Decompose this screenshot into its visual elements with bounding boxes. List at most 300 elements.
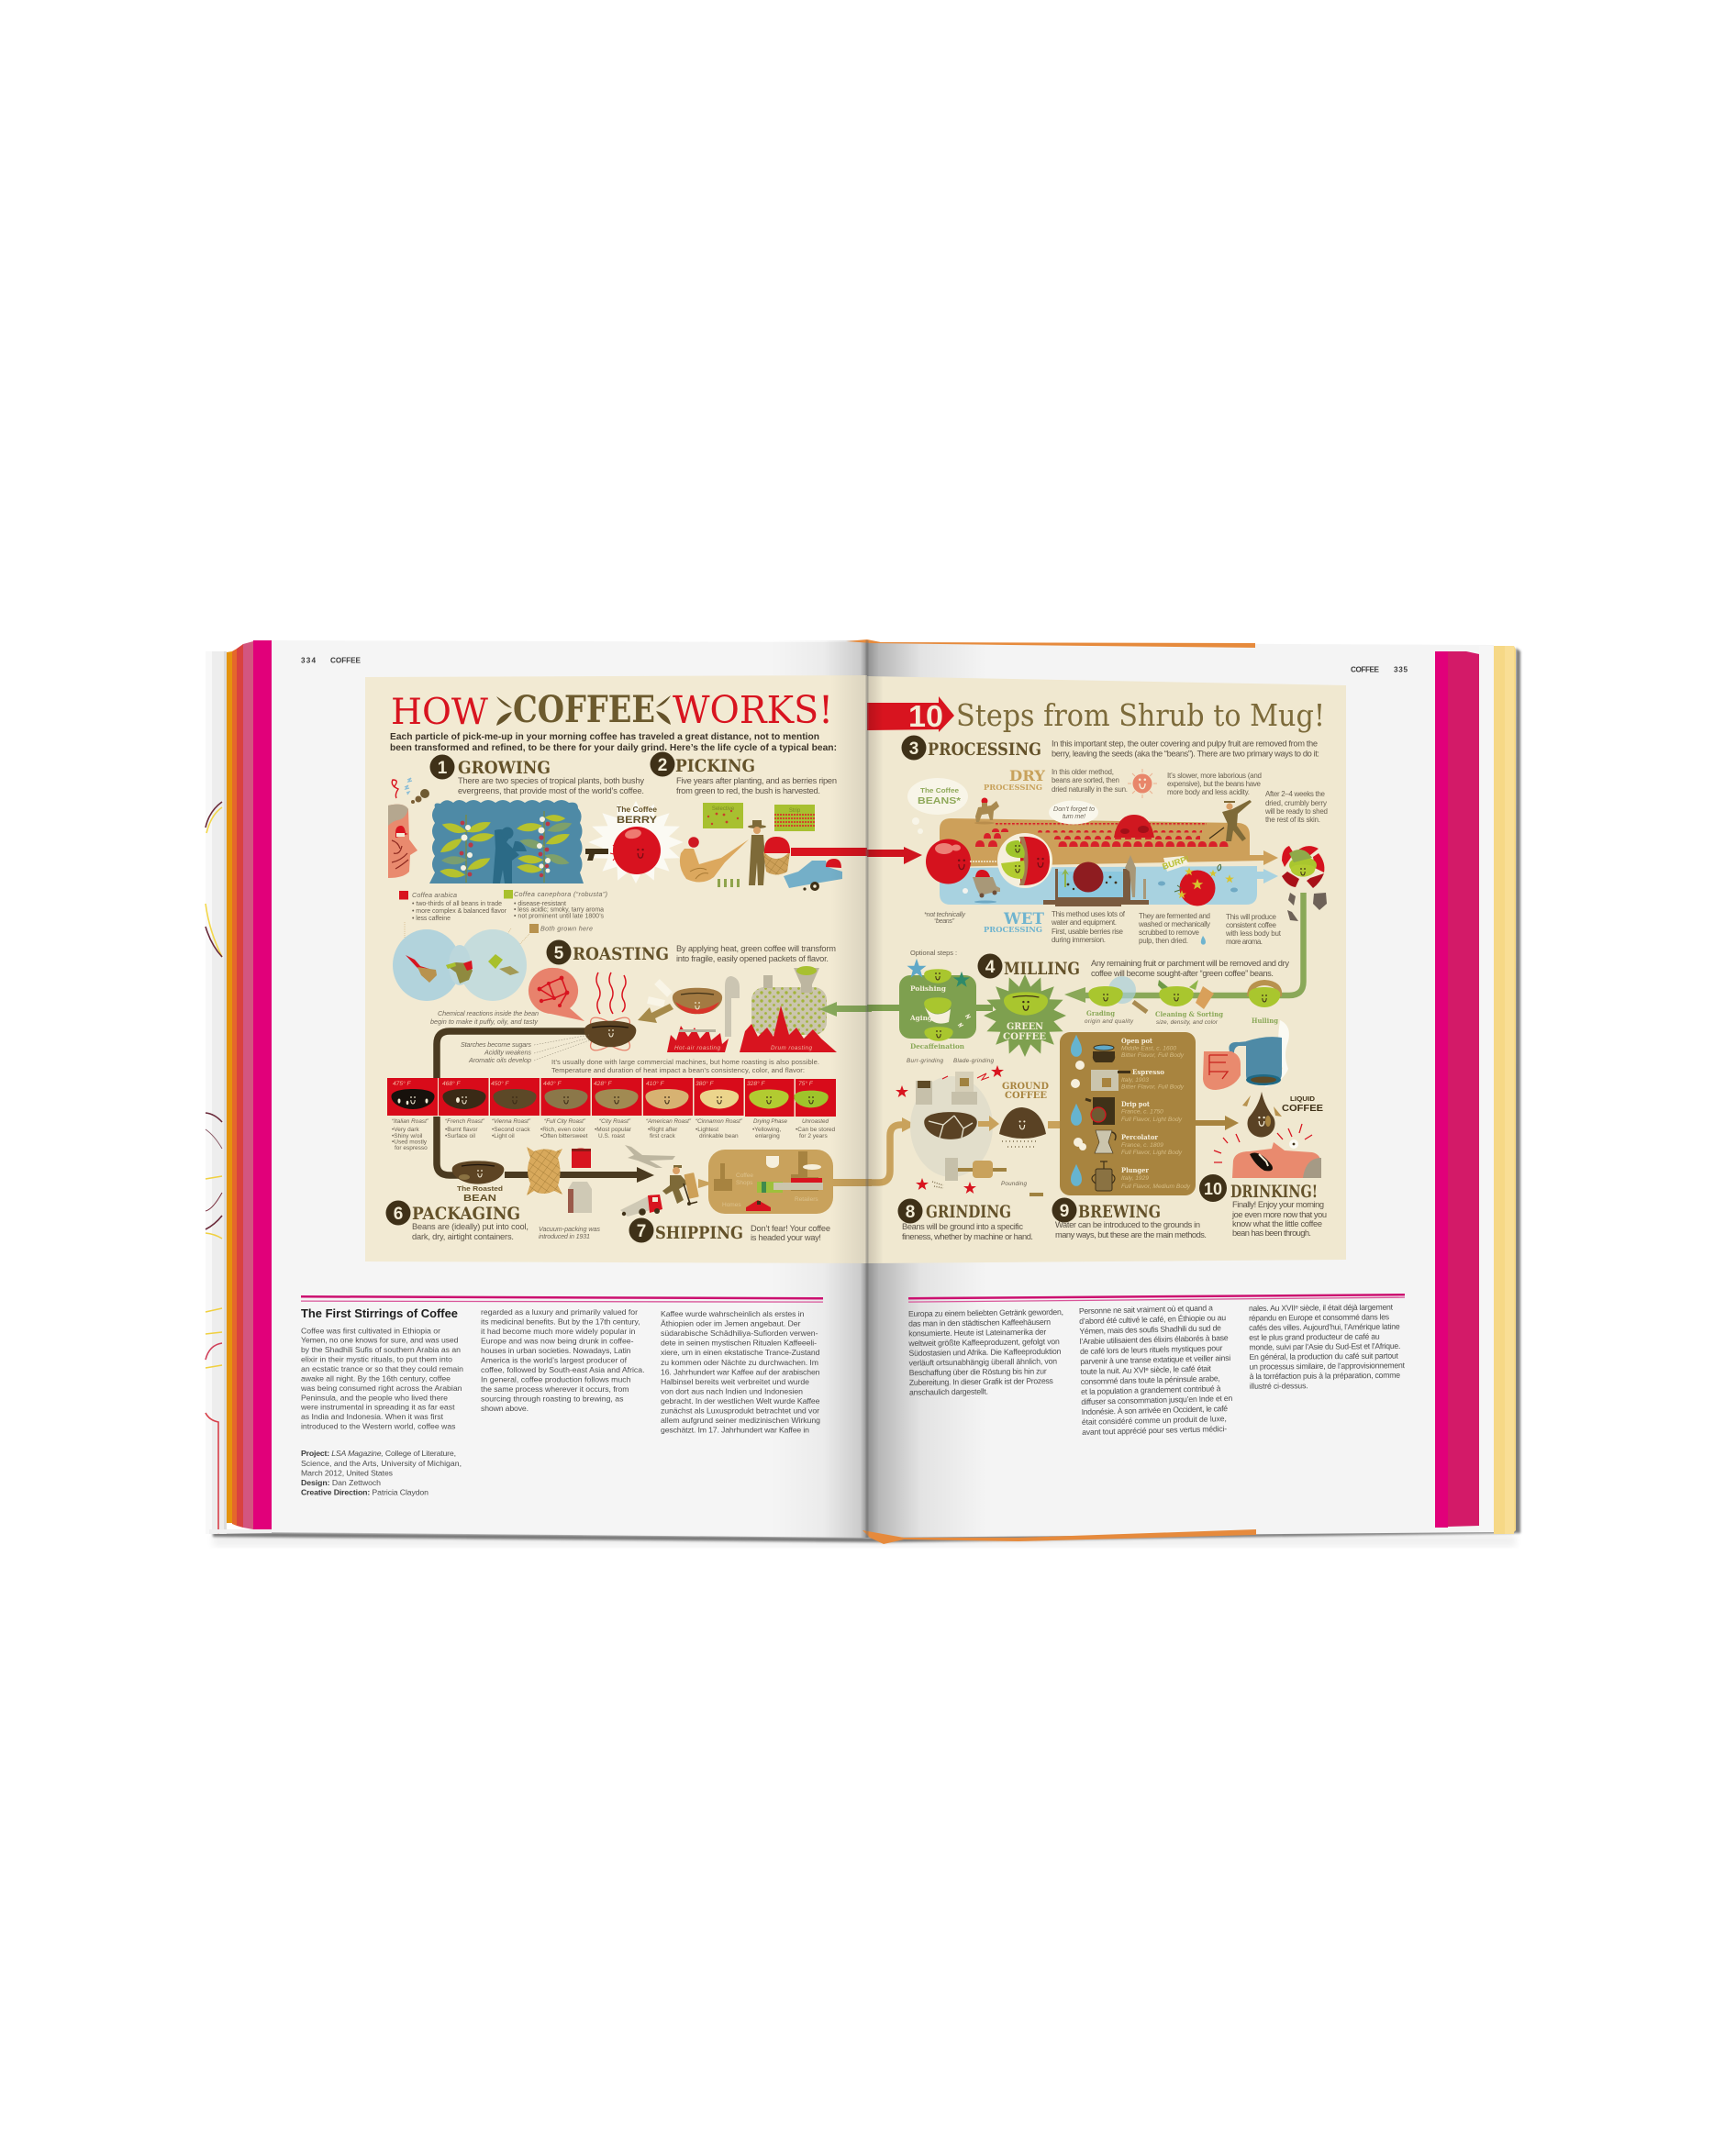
callout: don't forget to turn me: Don’t forget to xyxy=(1053,805,1095,813)
text: vacuum packing note: introduced in 1931 xyxy=(539,1232,590,1240)
chart: roast temperature strip: 468° F xyxy=(442,1080,461,1087)
step 2 picking heading: Five years after planting, and as berries ripen xyxy=(676,776,837,785)
text: dry method: will be ready to shed xyxy=(1264,807,1328,816)
text: grinding type labels xyxy=(907,1058,994,1064)
legend: coffee arabica: • more complex & balanced flavor xyxy=(412,908,507,915)
text: roast labels: “City Roast” xyxy=(599,1118,631,1125)
step 4 milling heading: coffee will become sought-after “green coffee” beans. xyxy=(1091,969,1274,978)
method: plunger: Italy, 1929 xyxy=(1121,1175,1149,1182)
text block: English column 1: Coffee was first cultivated in Ethiopia or xyxy=(301,1326,440,1335)
text: wet method: pulp, then dried. xyxy=(1139,937,1188,945)
text block: English column 1 xyxy=(300,1326,463,1431)
text block: French column 2: à la torréfaction puis à la préparation, comme xyxy=(1250,1371,1400,1381)
text: roast labels: •Light oil xyxy=(492,1133,515,1139)
legend: coffee canephora: • not prominent until late 1800’s xyxy=(514,914,604,919)
arrow: tan, roaster to bean xyxy=(638,1004,673,1023)
text block: French column 1: de café lors de leurs rituels mystiques pour xyxy=(1080,1343,1223,1356)
text: optional steps: Optional steps : xyxy=(910,949,957,957)
running head right xyxy=(1351,666,1408,673)
illustration: fermenting berry: BURP! xyxy=(1162,854,1191,872)
text: wet method: scrubbed to remove xyxy=(1139,928,1200,937)
illustration: roasted bean: BEAN xyxy=(463,1193,496,1204)
step 6 packaging heading: Beans are (ideally) put into cool, xyxy=(412,1222,529,1231)
legend: coffee canephora: • less acidic; smoky, tarry aroma xyxy=(514,906,604,914)
path: dark line roast strip to roasted bean xyxy=(437,1117,463,1175)
text: roast labels: •Used mostly xyxy=(392,1139,428,1145)
rule lines left xyxy=(301,1295,823,1303)
text: first stirrings heading: The First Stirrings of Coffee xyxy=(301,1306,458,1320)
text block: French column 2: un processus similaire, de l’approvisionnement xyxy=(1249,1361,1406,1372)
step 5 roasting heading: into fragile, easily opened packets of flavor. xyxy=(676,954,829,963)
text block: German column xyxy=(661,1309,820,1435)
text: bean changes: Aromatic oils develop xyxy=(468,1056,531,1064)
step 9 brewing heading xyxy=(1052,1198,1207,1239)
step 8 grinding heading: Beans will be ground into a specific xyxy=(902,1222,1023,1231)
illustration: washing basin xyxy=(1043,855,1149,906)
illustration: big berry xyxy=(926,839,971,884)
illustration: drum roaster xyxy=(740,966,872,1052)
text block: German column: xiere, um in einen ekstatische Trance-Zustand xyxy=(661,1348,820,1357)
text block: English column 1: awake all night. By the 16th century, coffee xyxy=(301,1373,451,1383)
step 8 grinding heading xyxy=(897,1198,1033,1241)
banner: 10 steps heading: Steps from Shrub to Mug! xyxy=(956,697,1325,733)
legend: coffee canephora: Coffea canephora (“robusta”) xyxy=(514,890,607,898)
text block: French column 2: nales. Au XVIIᵉ siècle, il était déjà largement xyxy=(1249,1303,1394,1313)
text block: English column 1: introduced to the Western world, coffee was xyxy=(301,1422,456,1431)
text block: French column 1: Indonésie. À son arrivée en Occident, le café xyxy=(1081,1404,1228,1417)
step 6 packaging heading: PACKAGING xyxy=(412,1204,520,1224)
text block: English column 1: Yemen, no one knows for sure, and was used xyxy=(301,1336,459,1345)
text block: French column 1: et la population a grandement contribué à xyxy=(1081,1384,1221,1396)
text: dry method: expensive), but the beans have xyxy=(1167,780,1262,788)
dry processing label xyxy=(984,767,1046,793)
step 6 packaging heading: 6 xyxy=(394,1205,403,1224)
step 8 grinding heading: fineness, whether by machine or hand. xyxy=(902,1232,1033,1241)
coloured book block stripes, left xyxy=(227,640,272,1529)
illustration: farmer raking xyxy=(1209,800,1252,841)
chart: roast temperature strip: 410° F xyxy=(646,1080,664,1087)
dry processing label: PROCESSING xyxy=(984,783,1042,793)
intro text xyxy=(390,732,837,753)
step 4 milling heading: 4 xyxy=(985,958,996,977)
illustration: hand, picker and tractor xyxy=(680,820,842,891)
text block: English column 2: shown above. xyxy=(481,1404,529,1413)
illustration: chemical bubble xyxy=(529,968,584,1021)
text block: English column 2: In general, coffee production follows much xyxy=(481,1374,631,1384)
right page xyxy=(867,642,1494,1538)
text block: German column right page: das man in den städtischen Kaffeehäusern xyxy=(908,1317,1051,1328)
text: roast labels: for espresso xyxy=(395,1145,428,1151)
text block: German column: dete in seinen mystischen Ritualen Kaffeeeli- xyxy=(661,1339,817,1348)
step 3 processing heading: 3 xyxy=(909,739,918,759)
illustration: city blob destination: Homes xyxy=(722,1202,741,1208)
text block: German column: Äthiopien oder im Jemen angebaut. Der xyxy=(661,1319,801,1328)
book drop shadow xyxy=(213,648,1520,1547)
text: not technically beans: “beans” xyxy=(934,917,955,925)
step 10 drinking heading xyxy=(1199,1174,1327,1238)
text: dry method: It’s slower, more laborious (and xyxy=(1167,772,1262,780)
text: wet method: This will produce xyxy=(1226,913,1277,921)
step 2 picking heading xyxy=(650,752,837,795)
legend: both grown here: Both grown here xyxy=(540,925,593,932)
illustration: coffee berry with starburst: BERRY xyxy=(617,815,658,826)
callout: the coffee beans cloud xyxy=(907,778,968,834)
text: vacuum packing note: Vacuum-packing was xyxy=(539,1225,600,1233)
text block: project credits: March 2012, United States xyxy=(301,1468,394,1477)
text: roast labels: enlarging xyxy=(755,1133,780,1139)
step 6 packaging heading: dark, dry, airtight containers. xyxy=(412,1232,514,1241)
step 7 shipping heading: SHIPPING xyxy=(655,1223,743,1243)
text block: French column 2: répandu en Europe et consommé dans les xyxy=(1249,1312,1390,1323)
text: chemical reactions note xyxy=(430,1009,539,1026)
text: roast labels: “Italian Roast” xyxy=(392,1118,429,1125)
illustration: hot-air roaster xyxy=(648,976,740,1052)
text: roast labels xyxy=(392,1118,835,1151)
step 6 packaging heading xyxy=(385,1200,529,1241)
text block: German column: Halbinsel bereits weit verbreitet und wurde xyxy=(661,1377,809,1386)
coloured book block stripes, right xyxy=(1435,646,1516,1534)
illustration: drinker face xyxy=(1214,1124,1321,1178)
running head left: 334 xyxy=(301,657,316,664)
text: chemical reactions note: begin to make it puffy, oily, and tasty xyxy=(430,1017,538,1026)
illustration: city blob destination: Shops xyxy=(736,1180,753,1186)
callout: don't forget to turn me: turn me! xyxy=(1063,812,1085,820)
step 3 processing heading: berry, leaving the seeds (aka the “beans”). There are two primary ways to do it: xyxy=(1052,749,1319,758)
text block: English column 2: its medicinal benefits. But by the 17th century, xyxy=(481,1317,640,1327)
text: roast labels: Drying Phase xyxy=(753,1118,787,1125)
text: wet method: They are fermented and xyxy=(1139,912,1210,920)
chart: roast temperature strip xyxy=(387,1078,836,1117)
text block: project credits: Project: LSA Magazine, College of Literature, xyxy=(301,1449,456,1458)
text: roast labels: “Full City Roast” xyxy=(544,1118,586,1125)
text block: French column 2: En général, la production du café suit partout xyxy=(1249,1351,1399,1361)
text: roasting note: Temperature and duration of heat impact a bean’s consistency, color, and flavor: xyxy=(551,1066,805,1074)
text block: German column right page: anschaulich dargestellt. xyxy=(909,1387,988,1397)
text: roast labels: •Rich, even color xyxy=(540,1127,586,1133)
text: roast labels: •Can be stored xyxy=(796,1127,835,1133)
illustration: coffee drop xyxy=(1242,1092,1323,1138)
chart: roast temperature strip: 475° F xyxy=(393,1080,411,1087)
illustration: city blob destination: Retailers xyxy=(795,1196,818,1203)
path: green line to milling xyxy=(1083,893,1303,995)
legend: coffee arabica xyxy=(399,891,507,922)
text block: project credits: Creative Direction: Patricia Claydon xyxy=(301,1488,428,1497)
text: dry method: dried, crumbly berry xyxy=(1265,799,1327,807)
illustration: ground coffee mound: COFFEE xyxy=(1005,1090,1047,1101)
text: dry method: beans are sorted, then xyxy=(1052,776,1119,784)
method: percolator: Full Flavor, Light Body xyxy=(1121,1150,1183,1156)
text: dry method: After 2–4 weeks the xyxy=(1265,790,1326,798)
intro text: been transformed and refined, to be there for your daily grind. Here’s the life cycle of a typical bean: xyxy=(390,743,837,753)
illustration: grinders and cracked bean xyxy=(896,1065,1043,1196)
text: dry method: more body and less acidity. xyxy=(1167,788,1250,796)
title: How Coffee Works xyxy=(391,688,833,733)
step 5 roasting heading: By applying heat, green coffee will transform xyxy=(676,944,836,953)
text block: French column 1: Personne ne sait vraiment où et quand a xyxy=(1079,1303,1213,1316)
illustration: cleaning and sorting bean xyxy=(1155,980,1224,1026)
text: roast labels: •Lightest xyxy=(696,1127,718,1133)
orange spine bottom xyxy=(862,1529,1256,1544)
text block: German column: zu kommen oder Nächte zu durchwachen. Im xyxy=(661,1358,818,1367)
text block: German column right page: Südostasien und Afrika. Die Kaffeeproduktion xyxy=(908,1347,1062,1358)
illustration: hot-air roaster: Hot-air roasting xyxy=(674,1045,720,1051)
text block: English column 1: was being consumed right across the Arabian xyxy=(300,1384,462,1393)
illustration: airplane xyxy=(625,1145,675,1168)
text: roast labels: •Second crack xyxy=(492,1127,530,1133)
text: roast labels: “Cinnamon Roast” xyxy=(696,1118,743,1125)
step 9 brewing heading: BREWING xyxy=(1078,1202,1161,1222)
text block: German column right page xyxy=(907,1307,1064,1397)
running head right: 335 xyxy=(1394,666,1408,673)
step 8 grinding heading: 8 xyxy=(906,1203,915,1222)
method: drip pot: France, c. 1750 xyxy=(1121,1108,1163,1116)
method: plunger: Plunger xyxy=(1121,1166,1150,1174)
running head right: COFFEE xyxy=(1351,666,1380,673)
text: wet method: more aroma. xyxy=(1226,938,1263,946)
text block: French column 1: avant tout apprécié pour ses vertus médici- xyxy=(1082,1424,1227,1437)
text: roast labels: for 2 years xyxy=(799,1133,828,1139)
method: open pot xyxy=(1071,1035,1185,1062)
illustration: coffee berry with starburst: The Coffee xyxy=(617,806,658,814)
text block: French column 2: illustré ci-dessus. xyxy=(1250,1381,1308,1391)
panel: optional steps box: Polishing xyxy=(910,984,947,993)
step 1 growing heading xyxy=(429,754,644,795)
step 10 drinking heading: joe even more now that you xyxy=(1231,1210,1327,1219)
text: roast labels: •Right after xyxy=(648,1127,678,1133)
text: roast labels: •Yellowing, xyxy=(752,1127,782,1133)
method: drip pot: Full Flavor, Light Body xyxy=(1121,1117,1183,1123)
text block: French column 1: parvenir à une transe extatique et veiller ainsi xyxy=(1080,1353,1230,1366)
text block: French column 1: toute la nuit. Au XVIᵉ siècle, le café était xyxy=(1080,1363,1212,1376)
step 8 grinding heading: GRINDING xyxy=(926,1202,1011,1222)
illustration: drum roaster: Drum roasting xyxy=(771,1045,812,1051)
text block: German column: 16. Jahrhundert war Kaffee auf der arabischen xyxy=(661,1367,820,1376)
text: roast labels: first crack xyxy=(650,1133,676,1139)
text block: English column 1: an ecstatic trance or so that they could remain xyxy=(301,1364,463,1373)
text block: German column: geschätzt. Im 17. Jahrhundert war Kaffee in xyxy=(661,1426,809,1435)
panel: poster background left xyxy=(365,675,867,1263)
text: wet method: consistent coffee xyxy=(1226,921,1277,929)
panel: brewing methods xyxy=(1060,1032,1196,1195)
illustration: delivery man with hand cart xyxy=(662,1165,699,1206)
step 10 drinking heading: DRINKING! xyxy=(1230,1182,1318,1202)
text: not technically beans: *not technically xyxy=(924,910,965,918)
illustration: city blob destination: Coffee xyxy=(736,1172,753,1179)
text: chemical reactions note: Chemical reactions inside the bean xyxy=(438,1009,539,1017)
rule lines right xyxy=(908,1294,1405,1303)
text block: English column 2: coffee, followed by South-east Asia and Africa. xyxy=(481,1365,644,1374)
step 1 growing heading: 1 xyxy=(438,759,448,778)
arrow: green head xyxy=(1064,987,1085,1003)
chart: roast temperature strip: 450° F xyxy=(491,1080,509,1087)
text block: French column 2: est le plus grand producteur de café au xyxy=(1249,1332,1380,1342)
method: plunger: Full Flavor, Medium Body xyxy=(1121,1184,1191,1190)
illustration: picking squares xyxy=(703,803,815,831)
step 5 roasting heading: ROASTING xyxy=(573,944,669,964)
panel: wet processing band xyxy=(940,866,1278,905)
illustration: cross-section berry xyxy=(997,833,1052,888)
text: roast labels: “Vienna Roast” xyxy=(492,1118,531,1125)
illustration: coffee drop: LIQUID xyxy=(1290,1095,1316,1103)
text block: English column 1: by the Shadhili Sufis of southern Arabia as an xyxy=(301,1345,461,1354)
illustration: delivery truck xyxy=(620,1195,662,1217)
step 2 picking heading: from green to red, the bush is harvested. xyxy=(676,786,820,795)
step 10 drinking heading: know what the little coffee xyxy=(1232,1219,1322,1228)
step 7 shipping heading: Don’t fear! Your coffee xyxy=(751,1224,830,1233)
illustration: coffee drop: COFFEE xyxy=(1282,1103,1323,1114)
path: dark line bean to roast strip xyxy=(437,1031,592,1078)
step 5 roasting heading xyxy=(547,939,836,965)
illustration: coffee berry with starburst xyxy=(585,801,684,884)
text: bean changes: Starches become sugars xyxy=(461,1040,531,1049)
legend: coffee canephora xyxy=(504,890,607,919)
illustration: horse rider xyxy=(974,798,999,824)
text block: English column 2: houses in urban societies. Nowadays, Latin xyxy=(481,1346,631,1355)
text block: German column: von dort aus nach Indien und Indonesien xyxy=(661,1386,803,1395)
left page xyxy=(209,640,867,1538)
panel: optional steps box xyxy=(867,959,993,1050)
illustration: fermenting berry xyxy=(1158,854,1238,906)
text block: French column 2: cafés des villes. Aujourd’hui, l’Amérique latine xyxy=(1249,1322,1400,1332)
chart: roast temperature strip: 75° F xyxy=(798,1080,814,1087)
text block: project credits: Science, and the Arts, University of Michigan, xyxy=(301,1459,462,1468)
text block: German column: gebracht. In der westlichen Welt wurde Kaffee xyxy=(661,1396,820,1406)
method: espresso xyxy=(1071,1061,1185,1091)
text: roast labels: •Very dark xyxy=(392,1127,419,1133)
text block: English column 2 xyxy=(481,1307,644,1413)
text block: project credits: Design: Dan Zettwoch xyxy=(301,1478,381,1487)
banner: 10 steps heading: 10 xyxy=(908,699,943,733)
illustration: ground coffee mound xyxy=(999,1081,1061,1147)
text block: German column right page: weltweit größte Kaffeeproduzent, gefolgt von xyxy=(907,1337,1060,1348)
callout: the coffee beans cloud: The Coffee xyxy=(920,786,959,795)
step 4 milling heading: Any remaining fruit or parchment will be removed and dry xyxy=(1091,959,1289,968)
text: dry method: dried naturally in the sun. xyxy=(1052,785,1128,794)
illustration: central roasted bean with atom orbit xyxy=(584,1012,636,1056)
text block: English column 2: regarded as a luxury and primarily valued for xyxy=(481,1307,638,1317)
illustration: grinders and cracked bean: Pounding xyxy=(1001,1181,1027,1187)
arrow: red, picking to processing xyxy=(791,847,922,864)
step 3 processing heading xyxy=(901,736,1319,760)
text: wet method: during immersion. xyxy=(1052,936,1106,944)
illustration: cleaning and sorting bean: Cleaning & Sorting xyxy=(1155,1010,1224,1018)
step 10 drinking heading: bean has been through. xyxy=(1232,1228,1311,1238)
illustration: roasted bean xyxy=(452,1161,504,1204)
text: wet method: with less body but xyxy=(1225,929,1282,938)
icon: green coffee burst: GREEN xyxy=(1007,1021,1043,1032)
text block: English column 2: sourcing through roasting to brewing, as xyxy=(481,1395,624,1404)
text block: French column 2: monde, suivi par l’Asie du Sud-Est et l’Afrique. xyxy=(1249,1341,1400,1351)
text block: German column: Kaffee wurde wahrscheinlich als erstes in xyxy=(661,1309,805,1318)
arrow: brewing to drinking xyxy=(1196,1116,1239,1130)
illustration: picking squares: Strip xyxy=(789,808,801,814)
method: espresso: Bitter Flavor, Full Body xyxy=(1121,1084,1185,1090)
method: espresso: Italy, 1903 xyxy=(1121,1077,1149,1084)
step 9 brewing heading: Water can be introduced to the grounds in xyxy=(1055,1220,1200,1229)
legend: coffee canephora: • disease-resistant xyxy=(514,901,566,907)
chart: roast temperature strip: 428° F xyxy=(594,1080,612,1087)
text: bean changes: Acidity weakens xyxy=(484,1048,531,1057)
callout: don't forget to turn me xyxy=(1049,800,1098,824)
step 2 picking heading: PICKING xyxy=(675,756,755,776)
text: roast labels: U.S. roast xyxy=(598,1133,625,1139)
illustration: hulling bean xyxy=(1249,983,1280,1025)
text: roast labels: •Often bittersweet xyxy=(540,1133,588,1139)
chart: roast temperature strip: 328° F xyxy=(747,1080,765,1087)
illustration: coffee plants on blue cloud xyxy=(429,800,584,884)
legend: coffee arabica: • two-thirds of all beans in trade xyxy=(412,901,502,907)
wet processing label: PROCESSING xyxy=(984,926,1042,935)
step 3 processing heading: In this important step, the outer covering and pulpy fruit are removed from the xyxy=(1052,739,1318,749)
text: grinding type labels: Blade-grinding xyxy=(953,1058,994,1064)
text block: German column: allem aufgrund seiner medizinischen Wirkung xyxy=(661,1416,820,1425)
illustration: ground coffee mound: GROUND xyxy=(1002,1081,1049,1092)
text block: English column 1: as India and Indonesia. When it was first xyxy=(301,1412,444,1421)
dry processing label: DRY xyxy=(1009,767,1046,784)
text block: French column 1: consommé dans toute la péninsule arabe, xyxy=(1081,1373,1220,1386)
text block: English column 2: Europe and was now being drunk in coffee- xyxy=(481,1336,634,1345)
step 10 drinking heading: Finally! Enjoy your morning xyxy=(1232,1200,1324,1209)
text block: French column 1: diffuser sa consommation jusqu’en Inde et en xyxy=(1081,1394,1233,1406)
method: percolator: France, c. 1809 xyxy=(1121,1142,1163,1149)
illustration: roasted bean: The Roasted xyxy=(457,1184,503,1193)
text block: English column 1: were instrumental in spreading it as far east xyxy=(300,1403,455,1412)
text: wet method: This method uses lots of xyxy=(1052,910,1126,918)
text block: German column right page: verläuft ortsunabhängig überall ähnlich, von xyxy=(909,1357,1057,1367)
method: drip pot: Drip pot xyxy=(1121,1100,1150,1108)
step 1 growing heading: GROWING xyxy=(458,758,551,778)
text block: German column: südarabische Schādhiliya-Sufiorden verwen- xyxy=(661,1328,818,1338)
text: roast labels: •Burnt flavor xyxy=(445,1127,478,1133)
text block: project credits xyxy=(301,1449,462,1497)
text: grinding type labels: Burr-grinding xyxy=(907,1058,943,1064)
path: dotted connector xyxy=(970,861,998,862)
step 3 processing heading: PROCESSING xyxy=(928,739,1041,760)
step 4 milling heading: MILLING xyxy=(1004,959,1080,979)
text: roast labels: Unroasted xyxy=(802,1118,829,1125)
chart: roast temperature strip: 440° F xyxy=(543,1080,562,1087)
icon: dreaming farmer face xyxy=(388,778,429,878)
text: wet method: washed or mechanically xyxy=(1138,920,1210,928)
panel: optional steps box: Decaffeination xyxy=(910,1042,965,1050)
text block: English column 2: the same process wherever it occurs, from xyxy=(481,1384,629,1394)
legend: coffee arabica: • less caffeine xyxy=(412,916,451,922)
method: percolator xyxy=(1074,1130,1183,1156)
text: roast labels: •Surface oil xyxy=(445,1133,476,1139)
step 1 growing heading: evergreens, that provide most of the world’s coffee. xyxy=(458,786,644,795)
method: open pot: Middle East, c. 1600 xyxy=(1121,1046,1176,1051)
text block: French column 1: était considéré comme un produit de luxe, xyxy=(1082,1414,1227,1427)
wet processing label xyxy=(984,910,1044,935)
illustration: grading bean: origin and quality xyxy=(1085,1018,1134,1025)
arrow: dark, bean to shipping xyxy=(505,1167,654,1183)
text: not technically beans xyxy=(924,910,965,925)
text: roast labels: drinkable bean xyxy=(699,1133,739,1139)
illustration: city blob destination xyxy=(698,1150,872,1214)
step 5 roasting heading: 5 xyxy=(554,944,564,963)
text: roasting note: It’s usually done with large commercial machines, but home roasting is also possible. xyxy=(551,1058,819,1066)
running head left xyxy=(301,657,362,664)
icon: green coffee burst: COFFEE xyxy=(1003,1031,1046,1042)
illustration: grading bean: Grading xyxy=(1086,1009,1116,1017)
fore-edge left with page-edge artwork xyxy=(206,651,227,1534)
text: vacuum packing note xyxy=(539,1225,600,1240)
step 1 growing heading: There are two species of tropical plants, both bushy xyxy=(458,776,644,785)
icon: heat waves xyxy=(596,972,626,1014)
step 9 brewing heading: many ways, but these are the main methods. xyxy=(1055,1230,1207,1239)
text block: French column 2 xyxy=(1249,1303,1406,1391)
text: roast labels: •Shiny w/oil xyxy=(392,1133,423,1139)
